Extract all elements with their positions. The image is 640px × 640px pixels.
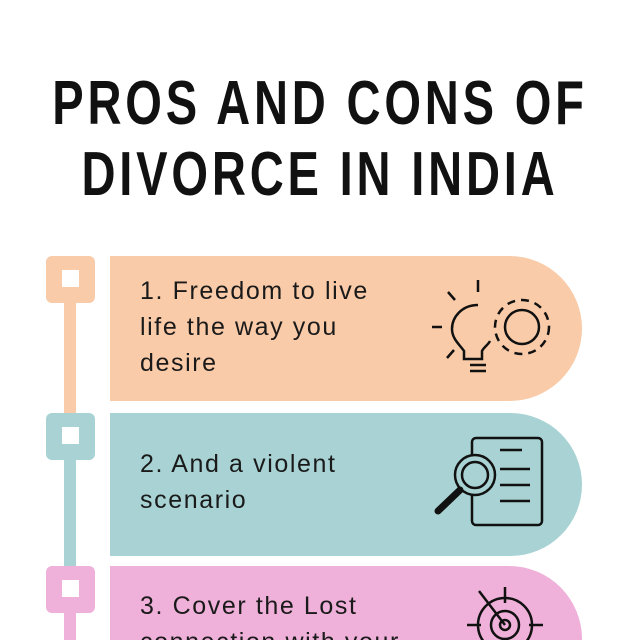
panel 3 [110,566,582,640]
text 1: life the way you [140,313,338,341]
icon: magnifier document [434,436,544,526]
title [52,69,588,209]
title: DIVORCE IN INDIA [81,140,559,209]
marker 3 [46,566,95,613]
text 1 [140,277,369,377]
text 1: desire [140,349,218,377]
panel 2 [110,413,582,556]
marker 2 [46,413,95,460]
text 1: 1. Freedom to live [140,277,369,305]
title: PROS AND CONS OF [52,69,588,138]
text 3: 3. Cover the Lost [140,592,358,620]
icon: target [467,587,543,640]
icon: bulb and gear [432,280,550,372]
text 2 [140,450,337,514]
text 2: scenario [140,486,247,514]
text 3 [140,592,400,640]
timeline connectors [64,303,76,640]
text 2: 2. And a violent [140,450,337,478]
panel 1 [110,256,582,401]
marker 1 [46,256,95,303]
